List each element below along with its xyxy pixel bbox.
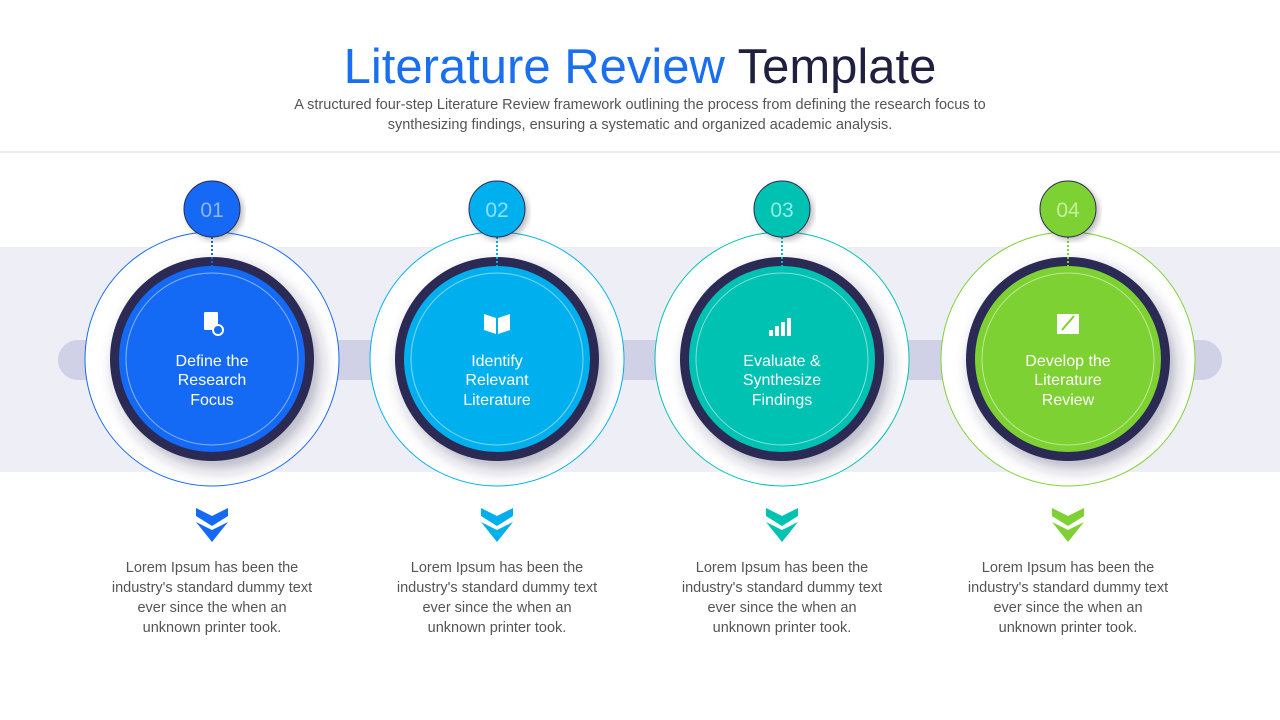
step 1 <box>85 181 339 542</box>
step 4: Review <box>1042 392 1095 409</box>
description 1: Lorem Ipsum has been the industry's standard dummy text ever since the when an unknown printer took. <box>112 560 312 636</box>
step 1: Focus <box>190 392 234 409</box>
step 4: 04 <box>1056 199 1080 222</box>
step 2: Literature <box>463 392 531 409</box>
step 3: Synthesize <box>743 372 821 389</box>
step 1: Research <box>178 372 246 389</box>
step 3: Evaluate & <box>743 353 821 370</box>
subtitle: A structured four-step Literature Review framework outlining the process from defining the research focus to <box>294 97 986 113</box>
step 4: Develop the <box>1025 353 1111 370</box>
track bar <box>58 340 1222 380</box>
step 2: Relevant <box>465 372 529 389</box>
step 3: Findings <box>752 392 812 409</box>
step 3: 03 <box>770 199 794 222</box>
step 2: Identify <box>471 353 523 370</box>
description 3: Lorem Ipsum has been the industry's standard dummy text ever since the when an unknown printer took. <box>682 560 882 636</box>
step 2 <box>370 181 624 542</box>
step 1: 01 <box>200 199 224 222</box>
description 4: Lorem Ipsum has been the industry's standard dummy text ever since the when an unknown printer took. <box>968 560 1168 636</box>
title: Literature Review Template <box>344 40 936 94</box>
subtitle <box>294 97 986 133</box>
step 1: Define the <box>176 353 249 370</box>
description 2: Lorem Ipsum has been the industry's standard dummy text ever since the when an unknown printer took. <box>397 560 597 636</box>
step 3 <box>655 181 909 542</box>
step 4 <box>941 181 1195 542</box>
step 2: 02 <box>485 199 509 222</box>
step 4: Literature <box>1034 372 1102 389</box>
subtitle: synthesizing findings, ensuring a systematic and organized academic analysis. <box>388 117 892 133</box>
